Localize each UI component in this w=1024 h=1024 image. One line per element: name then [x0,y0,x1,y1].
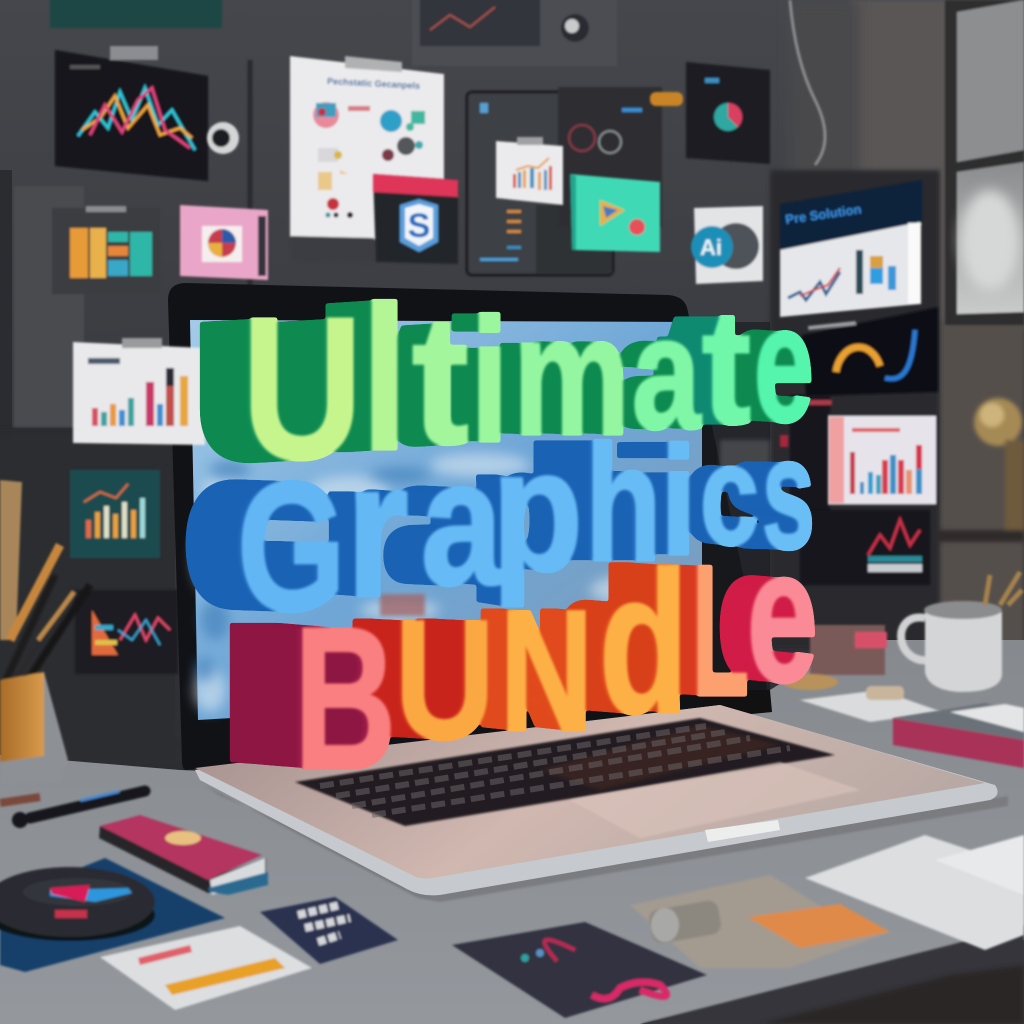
title line: BUNDLE: e [747,509,818,722]
keyboard [295,718,835,826]
panel: teal card [570,174,660,252]
icon: wall speaker [207,122,239,154]
panel: white bar chart [73,338,205,445]
title line: Graphics: p [492,413,583,607]
title line: Ultimate: U [242,275,363,501]
shield letter: S [408,207,430,245]
title line: Ultimate: l [361,264,408,493]
title line: Graphics: h [585,411,662,595]
dark card with magenta shapes [452,922,707,1018]
window [945,0,1024,325]
panel: red and black shield box [373,174,458,264]
title line: Ultimate: t [412,277,469,482]
title: Ultimate Graphics Bundle [186,264,818,810]
title line: BUNDLE: U [395,585,494,774]
icon: orange wall knob [650,92,683,106]
books [893,703,1024,768]
panel: clipboard document [290,56,444,264]
navy keypad card [260,897,398,964]
panel: AI card [691,206,763,284]
title line: Graphics: c [700,416,759,575]
title line: BUNDLE: B [294,584,396,810]
white card with orange bar [100,926,312,1010]
wall lamp [935,398,1024,542]
title line: Graphics: i [660,415,697,587]
desk [0,640,1024,1024]
marker pen [0,790,145,828]
panel: top teal strip [50,0,222,28]
laptop base [195,705,1008,902]
panel: dark red area chart [800,510,930,585]
trackpad [570,762,860,838]
title line: Graphics: r [346,421,409,638]
desk front edge [640,925,1024,1024]
panel: presentation stack [780,180,922,317]
title line: Ultimate: a [632,283,701,462]
panel: dark wave chart [75,590,178,674]
panel: tablet with charts [467,92,613,275]
panel: dark gauge chart [802,307,938,396]
panel: pink card [180,205,268,280]
title line: BUNDLE: d [599,530,689,755]
wall [0,0,1024,800]
AI label: Ai [700,235,722,260]
panel: top grey device [412,0,617,66]
pink box [99,815,268,895]
title line: Graphics: s [762,404,815,582]
panel: gauge screen [558,87,662,227]
title line: Graphics: a [421,422,503,622]
pencil cup with tools [0,480,90,784]
title line: Ultimate: i [470,283,509,479]
small heading: Pechstatic Gecanpels [327,76,420,91]
panel: red notes strip [780,395,832,515]
panel: colored table [52,206,160,294]
title line: Ultimate: t [702,275,751,458]
metal roll and orange booklet [630,875,890,968]
mug [901,572,1022,692]
desk items: small boxes and notes [782,625,942,722]
title line: BUNDLE: L [692,526,749,735]
white papers [805,835,1024,950]
title line: Ultimate: e [754,272,814,457]
presentation heading: Pre Solution [784,201,862,227]
title line: Ultimate: m [513,281,630,471]
panel: dark pie card [686,62,770,164]
title line: BUNDLE: N [500,575,593,767]
panel: teal chart [70,470,160,558]
panel: small white bar chart [496,137,563,205]
blue mat with dial [0,858,225,972]
panel: laptop screen [168,283,772,770]
panel: pink and white bar chart [828,413,938,507]
title line: Graphics: G [237,443,346,649]
panel: line chart tablet [55,46,208,181]
